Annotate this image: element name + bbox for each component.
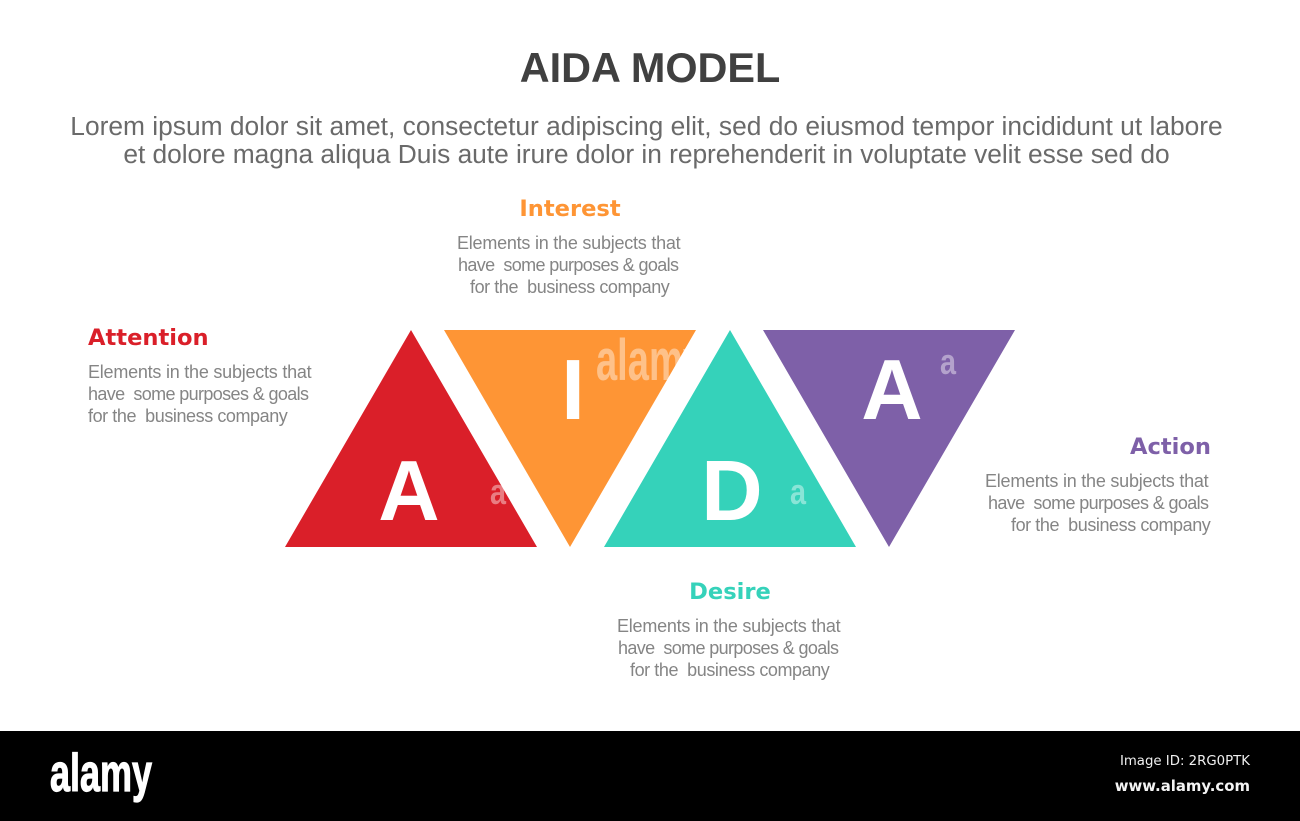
desire heading: Desire <box>689 579 771 605</box>
label: action <box>985 434 1211 535</box>
triangle: attention: A <box>378 444 440 539</box>
triangle: interest <box>444 330 696 547</box>
attention text <box>88 362 312 426</box>
action text: have some purposes & goals <box>988 493 1208 513</box>
triangle: action <box>763 330 1015 547</box>
label: desire <box>617 579 840 680</box>
interest text: have some purposes & goals <box>458 255 678 275</box>
attention text: Elements in the subjects that <box>88 362 311 382</box>
image id: Image ID: 2RG0PTK <box>1120 754 1250 769</box>
interest text: for the business company <box>470 277 669 297</box>
label: attention <box>88 325 312 426</box>
desire text <box>617 616 840 680</box>
interest text: Elements in the subjects that <box>457 233 680 253</box>
label: interest <box>457 196 680 297</box>
watermark on triangles: alamy <box>596 328 704 393</box>
triangle: attention <box>285 330 537 547</box>
interest text <box>457 233 680 297</box>
attention text: for the business company <box>88 406 287 426</box>
action text <box>985 471 1211 535</box>
watermark on triangles: a <box>790 471 807 512</box>
desire text: for the business company <box>630 660 829 680</box>
attention heading: Attention <box>88 325 209 351</box>
triangle: action: A <box>861 343 923 438</box>
subtitle text: et dolore magna aliqua Duis aute irure dolor in reprehenderit in voluptate velit esse sed do <box>123 139 1170 169</box>
desire text: Elements in the subjects that <box>617 616 840 636</box>
action text: for the business company <box>1011 515 1210 535</box>
watermark on triangles: a <box>940 341 957 382</box>
action text: Elements in the subjects that <box>985 471 1208 491</box>
watermark on triangles <box>490 328 957 512</box>
triangle: interest: I <box>561 343 585 438</box>
watermark on triangles: a <box>490 471 507 512</box>
website: www.alamy.com <box>1115 777 1250 795</box>
interest heading: Interest <box>519 196 621 222</box>
triangle: desire <box>604 330 856 547</box>
attention text: have some purposes & goals <box>88 384 308 404</box>
action heading: Action <box>1130 434 1211 460</box>
subtitle text <box>70 111 1223 169</box>
desire text: have some purposes & goals <box>618 638 838 658</box>
title: AIDA MODEL <box>520 45 780 91</box>
subtitle text: Lorem ipsum dolor sit amet, consectetur adipiscing elit, sed do eiusmod tempor incididunt ut labore <box>70 111 1223 141</box>
footer bar <box>0 731 1300 821</box>
triangle: desire: D <box>701 444 763 539</box>
